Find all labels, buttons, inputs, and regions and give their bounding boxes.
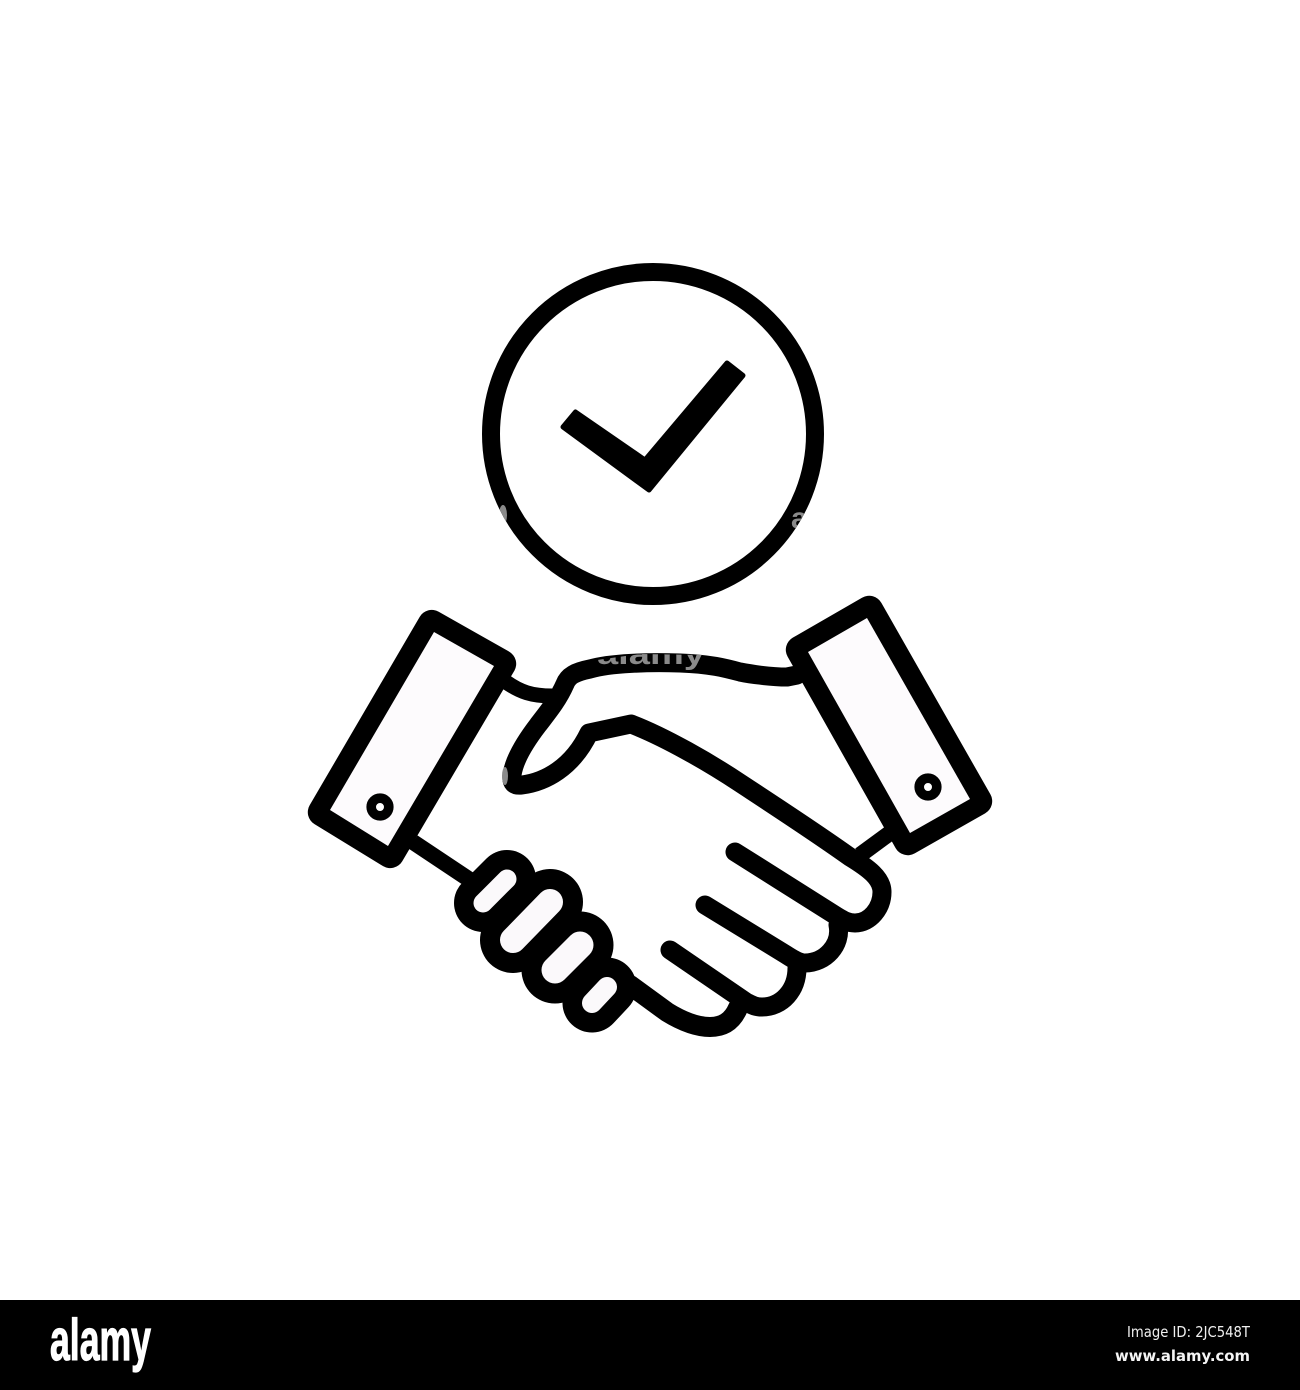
right cuff [800, 610, 978, 841]
watermark fragments on circle: a [791, 502, 808, 535]
left wrist band lower [413, 842, 470, 880]
icon: check mark in circle [491, 272, 815, 596]
upper hand and thumb outline [512, 663, 882, 923]
third finger [670, 950, 797, 1007]
second finger [705, 905, 839, 963]
lower finger edge [630, 985, 738, 1027]
footer bar [0, 1300, 1300, 1390]
left cuff [322, 624, 502, 854]
circle outline [491, 272, 815, 596]
left wrist band upper [506, 682, 552, 696]
image id: Image ID: 2JC548T [1127, 1323, 1251, 1341]
watermark fragments on circle [500, 505, 804, 528]
watermark fragment on handshake line: alamy [597, 638, 705, 671]
icon: handshake [322, 610, 978, 1027]
right wrist band [860, 833, 890, 855]
check mark [563, 363, 743, 490]
footer logo: alamy [50, 1308, 151, 1373]
knuckles of the left hand [483, 879, 607, 1003]
website: www.alamy.com [1115, 1347, 1250, 1365]
watermark fragment on thumb [502, 767, 508, 785]
